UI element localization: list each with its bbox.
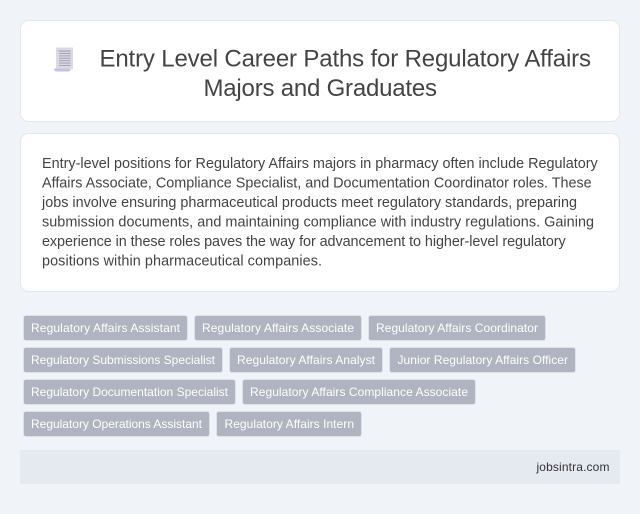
tag: Regulatory Affairs Associate (202, 321, 354, 335)
description text: Entry-level positions for Regulatory Affairs majors in pharmacy often include Regulatory (42, 156, 598, 172)
tag: Regulatory Documentation Specialist (31, 385, 229, 399)
description text: Affairs Associate, Compliance Specialist, and Documentation Coordinator roles. These (42, 175, 592, 191)
tag (216, 412, 362, 436)
tag (24, 316, 188, 340)
description text (41, 156, 598, 269)
title: Majors and Graduates (204, 75, 437, 102)
title (100, 46, 591, 102)
tag: Regulatory Affairs Intern (224, 417, 354, 431)
tag (390, 348, 576, 372)
tag (230, 348, 382, 372)
tag (24, 348, 222, 372)
tag: Regulatory Submissions Specialist (31, 353, 216, 367)
tag list: entry level job titles (24, 316, 576, 436)
icon: document scroll (54, 48, 73, 72)
tag: Regulatory Affairs Compliance Associate (250, 385, 468, 399)
panel: header card (20, 20, 620, 122)
footer bar: jobsintra.com (536, 460, 610, 474)
panel: description card (20, 134, 620, 292)
tag (24, 380, 236, 404)
footer bar (20, 450, 620, 484)
tag: Regulatory Affairs Analyst (237, 353, 376, 367)
tag (194, 316, 362, 340)
title: Entry Level Career Paths for Regulatory Affairs (100, 46, 591, 72)
tag (242, 380, 476, 404)
tag (24, 412, 210, 436)
tag (368, 316, 546, 340)
description text: submission documents, and maintaining compliance with industry regulations. Gaining (42, 214, 594, 230)
tag: Regulatory Affairs Assistant (31, 321, 181, 335)
description text: experience in these roles paves the way for advancement to higher-level regulatory (42, 234, 566, 250)
tag: Regulatory Affairs Coordinator (376, 321, 538, 335)
tag: Regulatory Operations Assistant (31, 417, 203, 431)
description text: positions within pharmaceutical companies. (42, 253, 322, 269)
description text: jobs involve ensuring pharmaceutical products meet regulatory standards, preparing (41, 195, 577, 211)
tag: Junior Regulatory Affairs Officer (398, 353, 568, 367)
